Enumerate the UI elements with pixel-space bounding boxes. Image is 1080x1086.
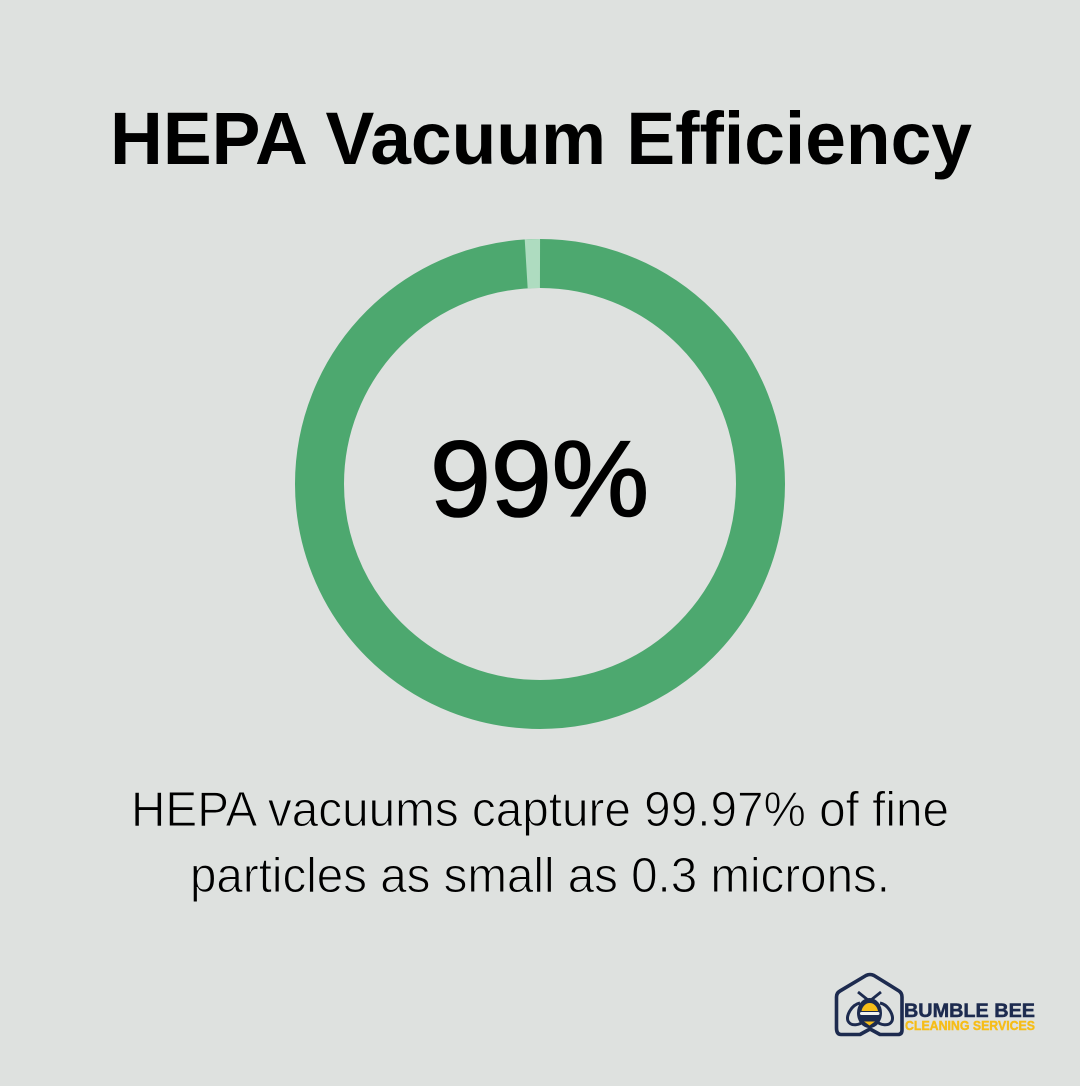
description text (131, 783, 949, 903)
logo icon: house outline with bee (836, 974, 902, 1034)
bee tail yellow (864, 1022, 875, 1026)
donut segment: remaining share (526, 239, 540, 288)
title: HEPA Vacuum Efficiency (110, 97, 972, 180)
logo name: BUMBLE BEE (904, 1000, 1035, 1022)
logo tagline: CLEANING SERVICES (905, 1019, 1035, 1033)
bee white stripe (860, 1012, 880, 1015)
house outline (836, 974, 902, 1034)
bee body (857, 998, 882, 1028)
donut chart: 99% (320, 263, 760, 704)
logo: Bumble Bee Cleaning Services (836, 974, 1035, 1034)
description line 2: particles as small as 0.3 microns. (190, 849, 890, 903)
bee antennae (858, 992, 881, 1000)
description line 1: HEPA vacuums capture 99.97% of fine (131, 783, 949, 837)
bee head yellow (862, 1003, 878, 1011)
donut segment: main share (320, 264, 760, 704)
bee wings (848, 1003, 892, 1025)
center value: 99% (430, 418, 649, 539)
